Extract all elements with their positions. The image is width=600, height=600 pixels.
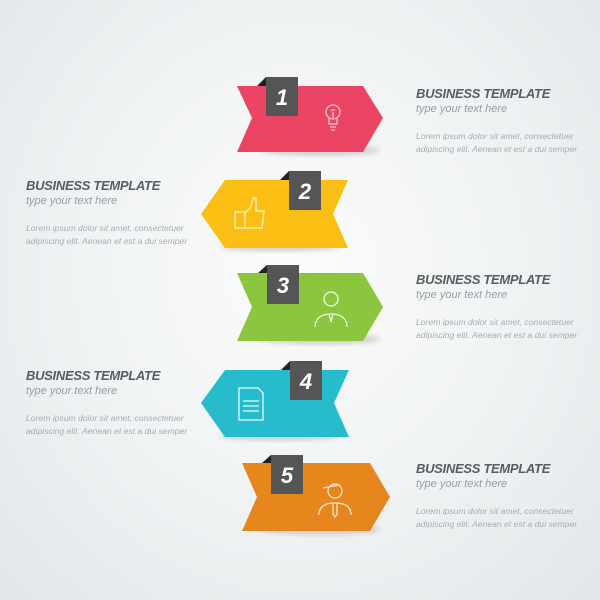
arrow 1: 1 xyxy=(276,85,288,110)
text block 3: Lorem ipsum dolor sit amet, consectetuer adipiscing elit. Aenean et est a dui semper xyxy=(416,317,577,340)
arrow 3 xyxy=(237,265,383,344)
text block 2: Lorem ipsum dolor sit amet, consectetuer adipiscing elit. Aenean et est a dui semper xyxy=(26,223,187,246)
text block 5: type your text here xyxy=(416,478,507,490)
text block 4: Lorem ipsum dolor sit amet, consectetuer adipiscing elit. Aenean et est a dui semper xyxy=(26,413,187,436)
text block 5: Lorem ipsum dolor sit amet, consectetuer adipiscing elit. Aenean et est a dui semper xyxy=(416,506,577,529)
text block 2 xyxy=(26,178,188,246)
text block 1 xyxy=(416,86,578,154)
text block 2: BUSINESS TEMPLATE xyxy=(26,178,160,193)
text block 4: BUSINESS TEMPLATE xyxy=(26,368,160,383)
arrow 3: 3 xyxy=(277,273,289,298)
text block 3: BUSINESS TEMPLATE xyxy=(416,272,550,287)
arrow 5 xyxy=(242,455,390,534)
icon: businessman xyxy=(319,484,351,517)
arrow 4: 4 xyxy=(299,369,312,394)
text block 1: BUSINESS TEMPLATE xyxy=(416,86,550,101)
icon: thumbs up xyxy=(235,198,264,228)
icon: bulb xyxy=(326,105,340,130)
text block 4 xyxy=(26,368,188,436)
text block 1: Lorem ipsum dolor sit amet, consectetuer adipiscing elit. Aenean et est a dui semper xyxy=(416,131,577,154)
text block 1: type your text here xyxy=(416,103,507,115)
icon: person xyxy=(315,292,347,327)
text block 5: BUSINESS TEMPLATE xyxy=(416,461,550,476)
text block 5 xyxy=(416,461,578,529)
arrow 2 xyxy=(201,171,348,251)
text block 3 xyxy=(416,272,578,340)
arrow 5: 5 xyxy=(281,463,294,488)
text block 4: type your text here xyxy=(26,385,117,397)
icon: document xyxy=(239,388,263,420)
arrow 1 xyxy=(237,77,383,155)
text block 3: type your text here xyxy=(416,289,507,301)
arrow 4 xyxy=(201,361,349,440)
arrow 2: 2 xyxy=(298,179,312,204)
text block 2: type your text here xyxy=(26,195,117,207)
